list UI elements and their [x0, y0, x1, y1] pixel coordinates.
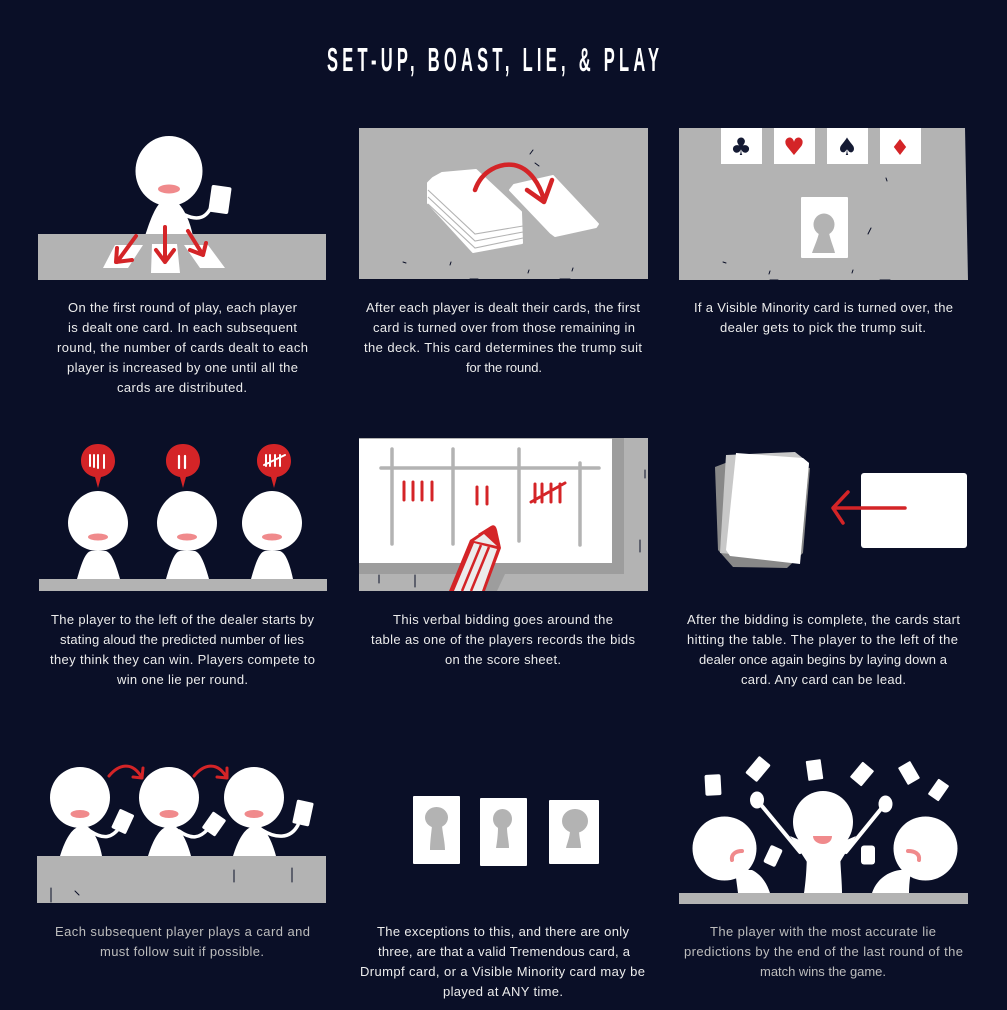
suit cards: ♣ — [730, 133, 752, 161]
suit cards: ♦ — [890, 136, 910, 161]
text: score sheet: on the score sheet. — [445, 652, 561, 667]
text: trump card: After each player is dealt their cards, the first — [366, 300, 640, 315]
text: bidding: win one lie per round. — [116, 672, 248, 687]
text: bidding — [50, 612, 315, 687]
text: score sheet: table as one of the players records the bids — [371, 632, 636, 647]
text: winner — [684, 924, 963, 979]
text: dealing — [57, 300, 308, 395]
dealt cards — [103, 244, 225, 273]
card stack — [715, 452, 810, 568]
card one — [413, 796, 460, 864]
score grid — [381, 449, 599, 545]
text: trump card: card is turned over from those remaining in — [373, 320, 635, 335]
text: card play: dealer once again begins by laying down a — [699, 652, 948, 667]
panel: dealing cards — [38, 136, 326, 395]
text: dealing: is dealt one card. In each subsequent — [68, 320, 297, 335]
panel: bidding players — [39, 444, 327, 687]
text: visible minority: If a Visible Minority card is turned over, the — [694, 300, 953, 315]
text: winner: predictions by the end of the last round of the — [684, 944, 963, 959]
table background — [359, 128, 648, 279]
text: follow suit — [55, 924, 310, 959]
red deal arrows — [116, 227, 206, 262]
text: exceptions — [360, 924, 645, 999]
red arrow — [833, 492, 905, 523]
player figure with card — [136, 136, 232, 236]
title: SET-UP, BOAST, LIE, & PLAY — [327, 41, 659, 79]
text: dealing: round, the number of cards dealt to each — [57, 340, 308, 355]
losing player left — [692, 816, 770, 893]
text: winner: match wins the game. — [760, 964, 886, 979]
flying cards — [704, 756, 949, 867]
suit cards — [721, 128, 921, 164]
table — [679, 893, 968, 904]
text: visible minority — [694, 300, 953, 335]
text: trump card: for the round. — [466, 360, 542, 375]
card two — [480, 798, 527, 866]
red turn arrows — [109, 766, 227, 778]
table — [37, 856, 326, 903]
flipped card — [510, 176, 598, 236]
panel: exception cards — [360, 796, 645, 999]
red tallies — [404, 482, 565, 504]
text: bidding: stating aloud the predicted number of lies — [60, 632, 304, 647]
text: exceptions: played at ANY time. — [443, 984, 563, 999]
card three — [549, 800, 599, 864]
text: winner: The player with the most accurate lie — [710, 924, 936, 939]
suit cards: ♠ — [836, 133, 858, 161]
text: trump card — [364, 300, 642, 375]
panel: winner celebrates — [679, 756, 968, 979]
text: score sheet — [371, 612, 636, 667]
table background — [679, 128, 968, 280]
text: card play: card. Any card can be lead. — [741, 672, 906, 687]
text: dealing: player is increased by one until all the — [67, 360, 298, 375]
text: dealing: On the first round of play, each player — [68, 300, 298, 315]
text: exceptions: The exceptions to this, and there are only — [377, 924, 630, 939]
text: follow suit: must follow suit if possible. — [100, 944, 264, 959]
table — [39, 579, 327, 591]
pencil — [449, 525, 501, 591]
three players holding cards — [50, 767, 314, 856]
text: exceptions: three, are that a valid Tremendous card, a — [378, 944, 631, 959]
text: card play: hitting the table. The player to the left of the — [687, 632, 958, 647]
losing player right — [872, 816, 958, 893]
text: bidding: they think they can win. Players compete to — [50, 652, 315, 667]
speech bubbles with tallies — [81, 444, 291, 488]
panel: following suit — [37, 766, 326, 959]
text: card play — [687, 612, 960, 687]
text: trump card: the deck. This card determines the trump suit — [364, 340, 642, 355]
card deck — [428, 170, 523, 252]
panel: score sheet — [359, 438, 648, 667]
portrait card — [801, 197, 848, 258]
sheet shadow — [359, 438, 624, 574]
played card — [861, 473, 967, 548]
red flip arrow — [475, 165, 552, 202]
table — [38, 234, 326, 280]
panel: visible minority card — [679, 128, 968, 335]
winning player — [750, 791, 892, 893]
suit cards: ♥ — [783, 133, 805, 161]
three players — [68, 491, 302, 579]
text: exceptions: Drumpf card, or a Visible Minority card may be — [360, 964, 645, 979]
text: card play: After the bidding is complete, the cards start — [687, 612, 960, 627]
panel: turning trump card — [359, 128, 648, 375]
text: bidding: The player to the left of the dealer starts by — [51, 612, 314, 627]
text: follow suit: Each subsequent player plays a card and — [55, 924, 310, 939]
score sheet — [359, 439, 612, 563]
text: dealing: cards are distributed. — [117, 380, 247, 395]
panel: laying down a card — [687, 452, 967, 687]
text: score sheet: This verbal bidding goes around the — [393, 612, 613, 627]
text: visible minority: dealer gets to pick the trump suit. — [720, 320, 926, 335]
table background — [359, 438, 648, 591]
